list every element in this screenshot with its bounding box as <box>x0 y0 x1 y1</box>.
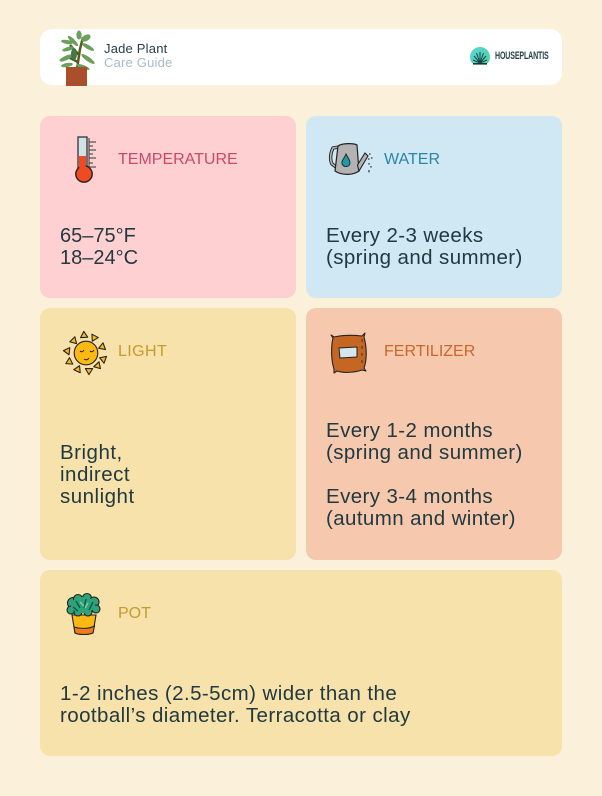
icon: watering can <box>328 143 372 175</box>
light requirement <box>60 441 135 508</box>
heading: temperature: TEMPERATURE <box>118 151 238 168</box>
logo: Houseplantis: HOUSEPLANTIS <box>495 50 549 62</box>
header bar <box>40 29 562 85</box>
icon: jade plant in pot <box>60 30 95 86</box>
panel: fertilizer <box>306 308 562 560</box>
watering frequency: (spring and summer) <box>326 246 523 269</box>
fertilizing frequency <box>326 419 523 530</box>
icon: smiling sun <box>62 330 107 376</box>
title text: Jade Plant <box>104 41 167 56</box>
logo: Houseplantis <box>470 47 549 65</box>
subtitle text: Care Guide <box>104 55 172 70</box>
light requirement: sunlight <box>60 485 135 508</box>
pot recommendation: 1-2 inches (2.5-5cm) wider than the <box>60 682 397 705</box>
panel: temperature <box>40 116 296 298</box>
temperature values: 65–75°F <box>60 225 136 247</box>
fertilizing frequency: Every 3-4 months <box>326 485 493 508</box>
watering frequency <box>326 224 523 269</box>
pot recommendation <box>60 682 411 727</box>
pot recommendation: rootball’s diameter. Terracotta or clay <box>60 704 411 727</box>
heading: pot: POT <box>118 605 151 622</box>
panel: light <box>40 308 296 560</box>
heading: water: WATER <box>384 151 440 168</box>
fertilizing frequency: (spring and summer) <box>326 441 523 464</box>
heading: fertilizer: FERTILIZER <box>384 343 475 360</box>
icon: thermometer <box>75 136 96 183</box>
temperature values: 18–24°C <box>60 247 138 269</box>
icon: fertilizer bag <box>330 332 367 374</box>
light requirement: indirect <box>60 463 130 486</box>
fertilizing frequency: Every 1-2 months <box>326 419 493 442</box>
watering frequency: Every 2-3 weeks <box>326 224 484 247</box>
light requirement: Bright, <box>60 441 123 464</box>
fertilizing frequency: (autumn and winter) <box>326 507 516 530</box>
temperature values <box>60 225 138 269</box>
heading: light: LIGHT <box>118 343 167 360</box>
panel: pot <box>40 570 562 756</box>
panel: water <box>306 116 562 298</box>
icon: potted plant <box>66 593 100 635</box>
